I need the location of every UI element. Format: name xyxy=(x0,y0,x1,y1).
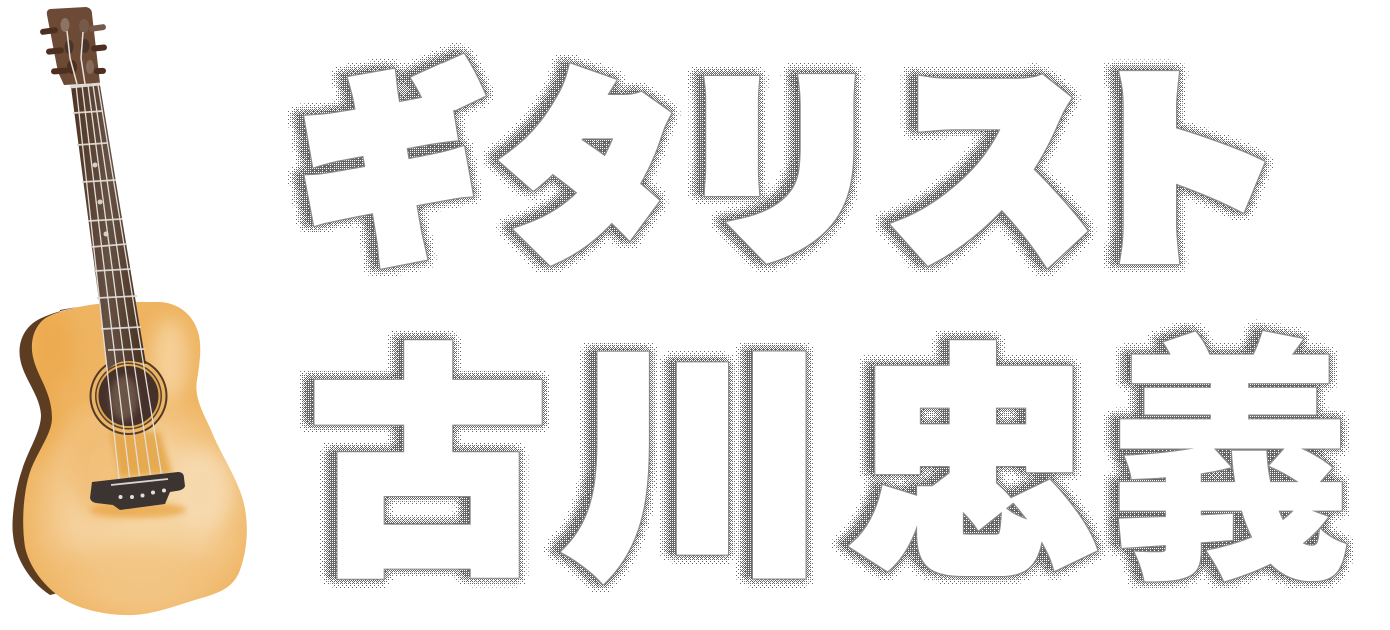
heading: ギタリスト: ギ xyxy=(301,60,481,284)
headstock xyxy=(47,7,100,85)
illustration: acoustic guitar xyxy=(12,7,247,615)
strings xyxy=(76,85,164,497)
tuning pegs xyxy=(40,18,107,75)
frets xyxy=(73,111,145,350)
fret markers xyxy=(92,162,108,236)
bridge xyxy=(90,472,185,510)
body shading xyxy=(24,312,232,594)
fretboard xyxy=(71,85,146,370)
heading: ギタリスト: タ xyxy=(504,64,676,284)
heading: 古川忠義: 古 xyxy=(311,335,545,603)
heading: 古川忠義 xyxy=(311,319,1351,612)
heading: 古川忠義: 川 xyxy=(565,333,829,602)
saddle and bridge pins xyxy=(111,479,168,499)
heading: 古川忠義: 義 xyxy=(1109,319,1351,612)
guitar body top xyxy=(23,302,247,615)
guitar body side xyxy=(12,305,90,595)
headstock string slots xyxy=(67,31,85,84)
title text with stippled shadow xyxy=(301,54,1351,612)
heading: ギタリスト: ス xyxy=(893,54,1089,290)
heading: ギタリスト: ト xyxy=(1070,58,1278,289)
nut xyxy=(70,84,100,87)
heading: ギタリスト: リ xyxy=(677,59,883,284)
heading: 古川忠義: 忠 xyxy=(853,334,1095,603)
sound hole xyxy=(90,357,168,435)
heading: ギタリスト xyxy=(301,54,1278,290)
